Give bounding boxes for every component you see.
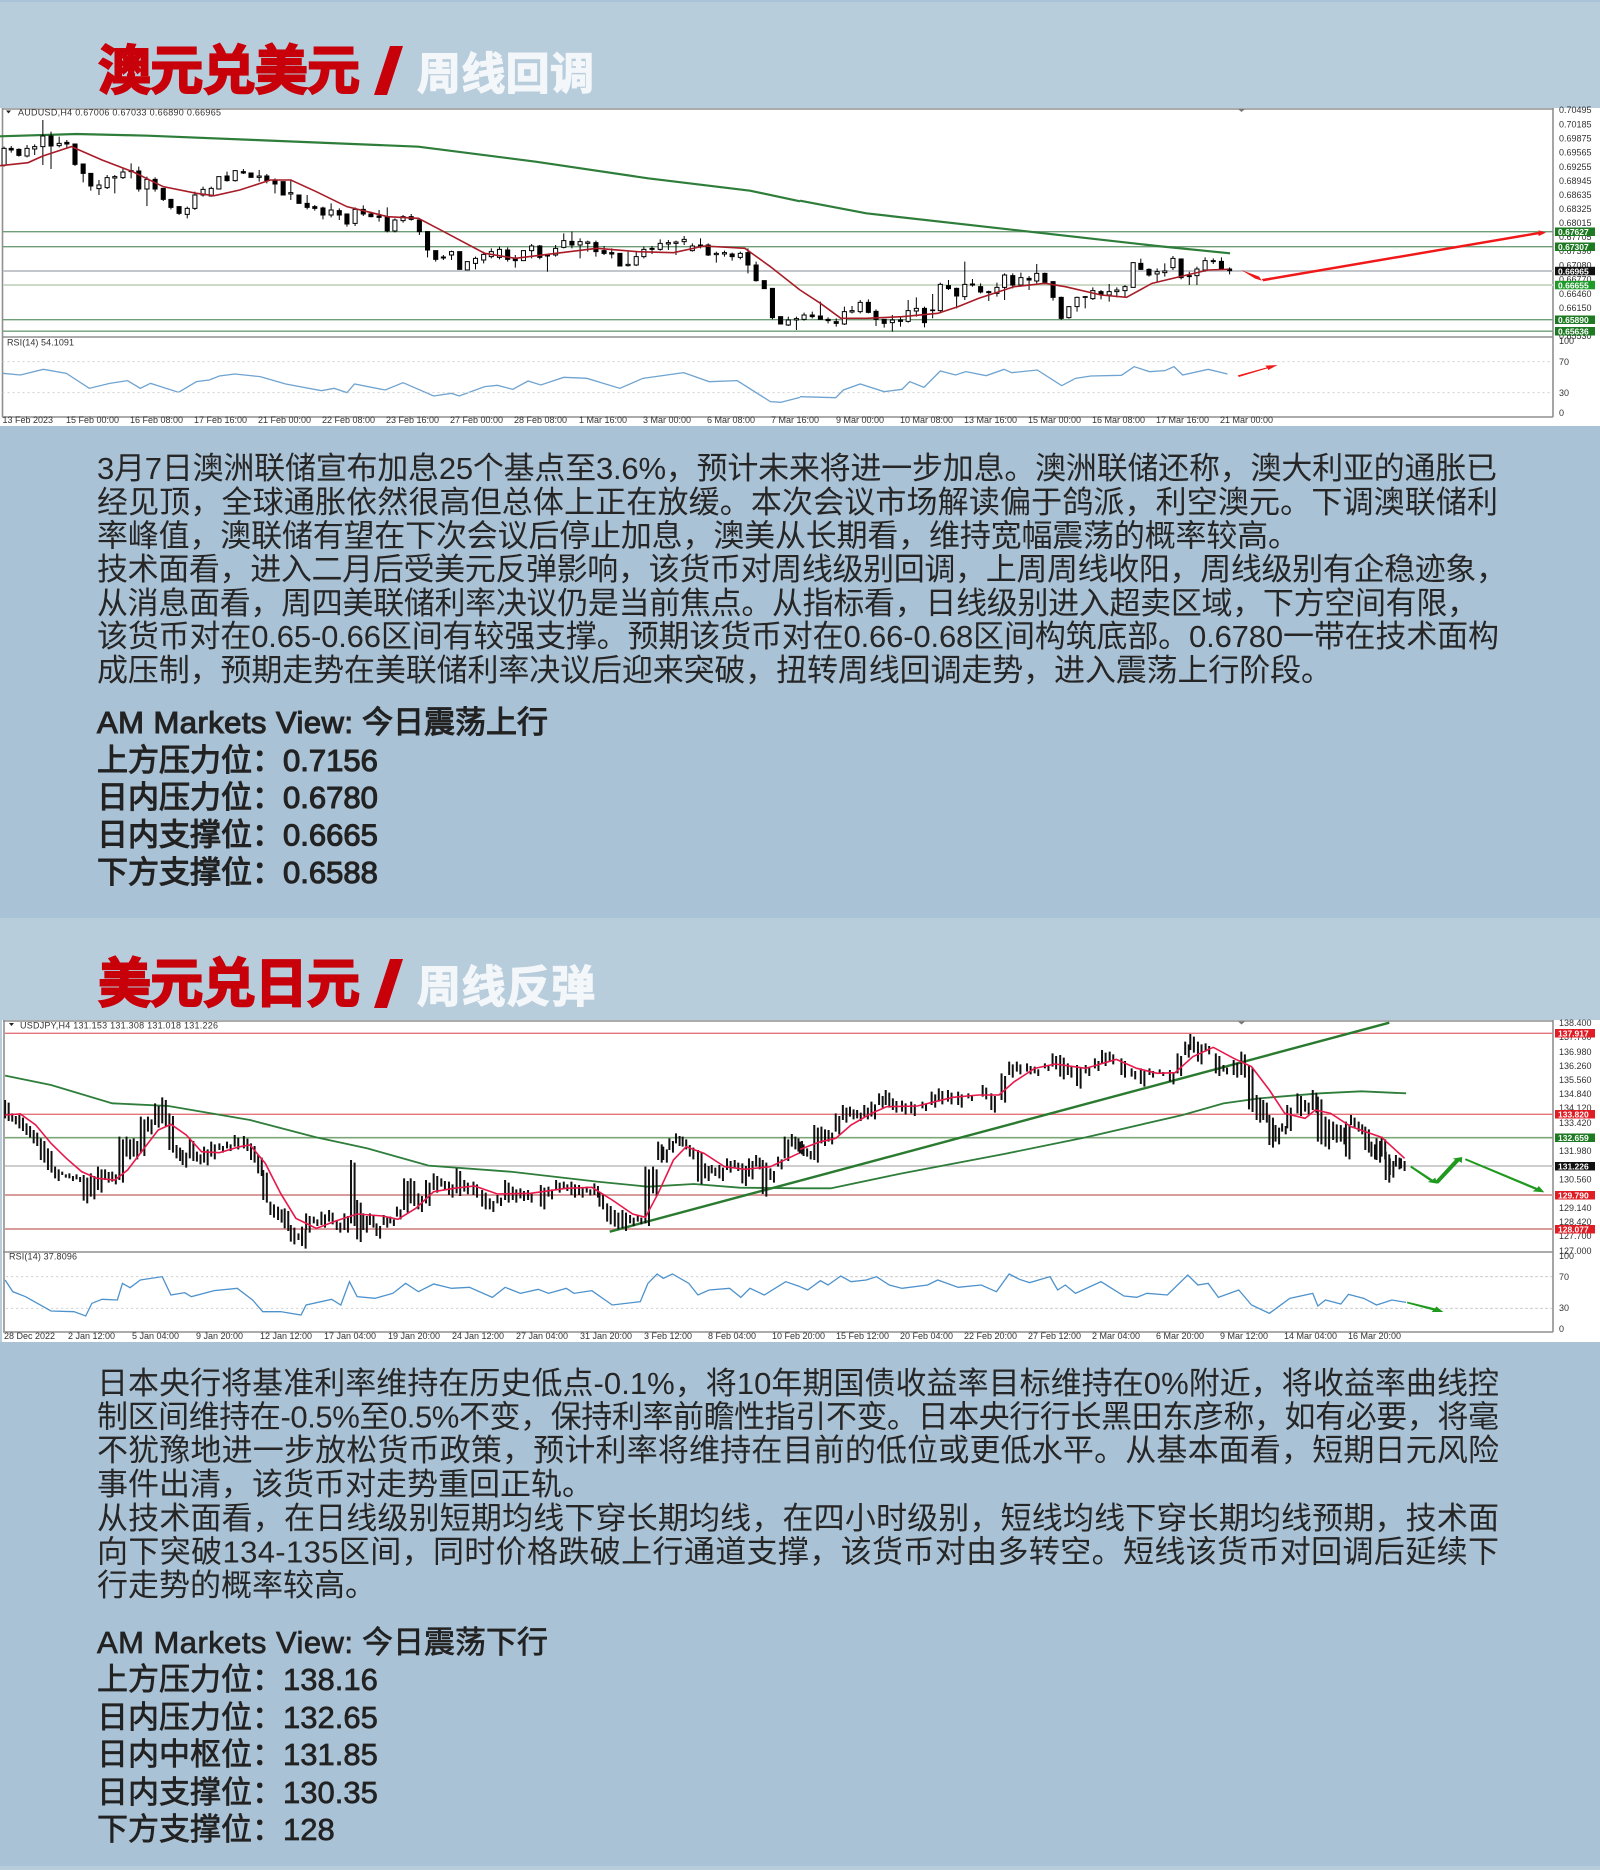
time axis labels: 1 Mar 16:00 bbox=[579, 415, 627, 425]
key levels: USD/JPY view: AM Markets View: bbox=[97, 1625, 353, 1660]
title: AUD/USD weekly pullback: 周线回调 bbox=[417, 50, 594, 99]
price level tags: 0.67627 bbox=[1558, 227, 1589, 237]
time axis labels: 19 Jan 20:00 bbox=[388, 1331, 440, 1341]
time axis labels: 22 Feb 08:00 bbox=[322, 415, 375, 425]
key levels: USD/JPY view: 上方压力位： bbox=[97, 1662, 283, 1697]
time axis labels: 2 Jan 12:00 bbox=[68, 1331, 115, 1341]
text block: AUD/USD analysis: 成压制，预期走势在美联储利率决议后迎来突破，扭转周线回调走势，进入震荡上行阶段。 bbox=[97, 653, 1332, 688]
key levels: AUD/USD view bbox=[97, 705, 548, 890]
price level tags: 133.820 bbox=[1558, 1110, 1589, 1120]
price axis labels: 129.140 bbox=[1559, 1203, 1592, 1213]
time axis labels: 20 Feb 04:00 bbox=[900, 1331, 953, 1341]
title: AUD/USD weekly pullback bbox=[98, 42, 594, 101]
price axis labels: 0.69565 bbox=[1559, 148, 1592, 158]
key levels: USD/JPY view: 今日震荡下行 bbox=[362, 1625, 548, 1660]
time axis labels: 6 Mar 08:00 bbox=[707, 415, 755, 425]
text block: AUD/USD analysis bbox=[97, 451, 1507, 688]
text block: USD/JPY analysis: 向下突破134-135区间，同时价格跌破上行通道支撑，该货币对由多转空。短线该货币对回调后延续下 bbox=[97, 1534, 1499, 1570]
key levels: AUD/USD view: 上方压力位： bbox=[97, 743, 283, 778]
price axis labels: 0.67705 bbox=[1559, 232, 1592, 242]
price axis labels: 135.560 bbox=[1559, 1075, 1592, 1085]
text block: AUD/USD analysis: 技术面看，进入二月后受美元反弹影响，该货币对周线级别回调，上周周线收阳，周线级别有企稳迹象， bbox=[97, 552, 1507, 587]
text block: AUD/USD analysis: 该货币对在0.65-0.66区间有较强支撑。预期该货币对在0.66-0.68区间构筑底部。0.6780一带在技术面构 bbox=[97, 619, 1499, 654]
price level tags: 0.66655 bbox=[1558, 280, 1589, 290]
chart caption: AUDUSD,H4 0.67006 0.67033 0.66890 0.66965 bbox=[18, 108, 221, 118]
text block: USD/JPY analysis: 行走势的概率较高。 bbox=[97, 1568, 376, 1603]
key levels: USD/JPY view: 131.85 bbox=[283, 1737, 378, 1772]
price axis labels: 0.66460 bbox=[1559, 289, 1592, 299]
price axis labels: 0.66770 bbox=[1559, 274, 1592, 284]
price axis labels: 0.70495 bbox=[1559, 105, 1592, 115]
price axis labels: 0.70185 bbox=[1559, 120, 1592, 130]
candles and moving averages, right half bbox=[800, 1023, 1553, 1313]
price level tags: 0.67307 bbox=[1558, 242, 1589, 252]
chart caption: USDJPY,H4 131.153 131.308 131.018 131.226 bbox=[20, 1020, 218, 1030]
time axis labels: 3 Mar 00:00 bbox=[643, 415, 691, 425]
price axis labels: 134.840 bbox=[1559, 1089, 1592, 1099]
key levels: AUD/USD view: 0.7156 bbox=[283, 743, 378, 778]
price level tags: 0.65890 bbox=[1558, 315, 1589, 325]
panel: USD/JPY section bbox=[0, 918, 1600, 1847]
time axis labels: 15 Mar 00:00 bbox=[1028, 415, 1081, 425]
price axis labels: 70 bbox=[1559, 357, 1569, 367]
text block: USD/JPY analysis bbox=[97, 1366, 1499, 1603]
key levels: AUD/USD view: 下方支撑位： bbox=[97, 855, 283, 890]
price axis labels: 130.560 bbox=[1559, 1174, 1592, 1184]
time axis labels: 15 Feb 00:00 bbox=[66, 415, 119, 425]
time axis labels bbox=[4, 1331, 1401, 1341]
time axis labels: 27 Jan 04:00 bbox=[516, 1331, 568, 1341]
key levels: AUD/USD view: 0.6588 bbox=[283, 855, 378, 890]
moving averages and candles, right half bbox=[800, 201, 1546, 398]
time axis labels: 22 Feb 20:00 bbox=[964, 1331, 1017, 1341]
text block: USD/JPY analysis: 制区间维持在-0.5%至0.5%不变，保持利率前瞻性指引不变。日本央行行长黑田东彦称，如有必要，将毫 bbox=[97, 1400, 1499, 1434]
text block: USD/JPY analysis: 不犹豫地进一步放松货币政策，预计利率将维持在目前的低位或更低水平。从基本面看，短期日元风险 bbox=[97, 1433, 1499, 1468]
price axis labels: 70 bbox=[1559, 1272, 1569, 1282]
horizontal price levels bbox=[3, 232, 1553, 331]
text block: USD/JPY analysis: 事件出清，该货币对走势重回正轨。 bbox=[97, 1467, 593, 1502]
title: USD/JPY weekly rebound: 美元兑日元 bbox=[98, 955, 360, 1014]
price axis labels: 127.000 bbox=[1559, 1246, 1592, 1256]
moving averages and candles, left half bbox=[0, 120, 1551, 402]
title: AUD/USD weekly pullback: 澳元兑美元 bbox=[98, 42, 360, 101]
price axis labels: 136.980 bbox=[1559, 1047, 1592, 1057]
time axis labels: 9 Mar 00:00 bbox=[836, 415, 884, 425]
time axis labels: 8 Feb 04:00 bbox=[708, 1331, 756, 1341]
text block: USD/JPY analysis: 从技术面看，在日线级别短期均线下穿长期均线，在四小时级别，短线均线下穿长期均线预期，技术面 bbox=[97, 1501, 1499, 1536]
text block: AUD/USD analysis: 3月7日澳洲联储宣布加息25个基点至3.6%，预计未来将进一步加息。澳洲联储还称，澳大利亚的通胀已 bbox=[97, 451, 1497, 486]
icon: chart shift marker bbox=[1238, 1022, 1245, 1024]
time axis labels: 17 Mar 16:00 bbox=[1156, 415, 1209, 425]
time axis labels: 21 Mar 00:00 bbox=[1220, 415, 1273, 425]
panel: AUD/USD section bbox=[0, 2, 1600, 890]
horizontal price levels bbox=[5, 1033, 1553, 1229]
price axis labels: 100 bbox=[1559, 1251, 1574, 1261]
price axis labels: 0 bbox=[1559, 1324, 1564, 1334]
key levels: USD/JPY view: 130.35 bbox=[283, 1775, 378, 1810]
time axis labels: 3 Feb 12:00 bbox=[644, 1331, 692, 1341]
price axis labels: 100 bbox=[1559, 336, 1574, 346]
time axis labels: 16 Feb 08:00 bbox=[130, 415, 183, 425]
arrow: RSI forecast up bbox=[1238, 365, 1278, 377]
time axis labels: 23 Feb 16:00 bbox=[386, 415, 439, 425]
time axis labels: 27 Feb 00:00 bbox=[450, 415, 503, 425]
time axis labels: 31 Jan 20:00 bbox=[580, 1331, 632, 1341]
price level tags: 0.65636 bbox=[1558, 326, 1589, 336]
price axis labels: 0.68635 bbox=[1559, 190, 1592, 200]
key levels: USD/JPY view: 日内中枢位： bbox=[97, 1737, 283, 1772]
candles and moving averages, left half bbox=[5, 1076, 1551, 1316]
time axis labels: 5 Jan 04:00 bbox=[132, 1331, 179, 1341]
header band: USD/JPY bbox=[0, 918, 1600, 1020]
price level tags bbox=[1555, 227, 1595, 336]
price axis labels: 133.420 bbox=[1559, 1118, 1592, 1128]
key levels: AUD/USD view: 日内压力位： bbox=[97, 780, 283, 815]
text block: AUD/USD analysis: 经见顶，全球通胀依然很高但总体上正在放缓。本次会议市场解读偏于鸽派，利空澳元。下调澳联储利 bbox=[97, 485, 1498, 520]
text block: USD/JPY analysis: 日本央行将基准利率维持在历史低点-0.1%，将10年期国债收益率目标维持在0%附近，将收益率曲线控 bbox=[97, 1366, 1499, 1401]
arrow: price forecast up bbox=[1241, 230, 1546, 281]
price axis labels: 0.68325 bbox=[1559, 204, 1592, 214]
time axis labels: 16 Mar 08:00 bbox=[1092, 415, 1145, 425]
price axis labels: 137.700 bbox=[1559, 1032, 1592, 1042]
time axis labels: 17 Jan 04:00 bbox=[324, 1331, 376, 1341]
key levels: USD/JPY view: 日内支撑位： bbox=[97, 1775, 283, 1810]
key levels: AUD/USD view: 0.6780 bbox=[283, 780, 378, 815]
price axis labels: 0.65530 bbox=[1559, 331, 1592, 341]
time axis labels: 12 Jan 12:00 bbox=[260, 1331, 312, 1341]
chart: USDJPY H4 candlesticks with RSI bbox=[0, 1018, 1600, 1342]
price level tags: 0.66965 bbox=[1558, 266, 1589, 276]
time axis labels: 13 Feb 2023 bbox=[2, 415, 53, 425]
price level tags: 137.917 bbox=[1558, 1028, 1589, 1038]
text block: AUD/USD analysis: 率峰值，澳联储有望在下次会议后停止加息，澳美从长期看，维持宽幅震荡的概率较高。 bbox=[97, 518, 1299, 554]
arrow: RSI forecast down bbox=[1407, 1302, 1443, 1312]
time axis labels: 27 Feb 12:00 bbox=[1028, 1331, 1081, 1341]
key levels: USD/JPY view: 128 bbox=[283, 1812, 335, 1847]
time axis labels: 2 Mar 04:00 bbox=[1092, 1331, 1140, 1341]
icon: chart shift marker bbox=[1238, 109, 1245, 112]
chart: AUDUSD H4 candlesticks with RSI bbox=[0, 105, 1600, 426]
key levels: AUD/USD view: 今日震荡上行 bbox=[362, 705, 548, 740]
price level tags: 132.659 bbox=[1558, 1133, 1589, 1143]
time axis labels: 28 Dec 2022 bbox=[4, 1331, 55, 1341]
bottom band bbox=[0, 1866, 1600, 1870]
time axis labels: 13 Mar 16:00 bbox=[964, 415, 1017, 425]
arrow: price forecast down-up-down bbox=[1410, 1157, 1544, 1192]
price axis labels: 0.67390 bbox=[1559, 246, 1592, 256]
price axis labels: 30 bbox=[1559, 388, 1569, 398]
time axis labels: 9 Mar 12:00 bbox=[1220, 1331, 1268, 1341]
price level tags bbox=[1555, 1028, 1595, 1234]
time axis labels: 15 Feb 12:00 bbox=[836, 1331, 889, 1341]
RSI caption: RSI(14) 37.8096 bbox=[9, 1252, 77, 1262]
title: USD/JPY weekly rebound: 周线反弹 bbox=[417, 963, 595, 1012]
icon: chart dropdown marker bbox=[6, 110, 11, 114]
time axis labels: 17 Feb 16:00 bbox=[194, 415, 247, 425]
RSI caption: RSI(14) 54.1091 bbox=[7, 338, 74, 348]
key levels: USD/JPY view bbox=[97, 1625, 548, 1847]
price level tags: 128.077 bbox=[1558, 1224, 1589, 1234]
key levels: USD/JPY view: 132.65 bbox=[283, 1700, 378, 1735]
time axis labels: 6 Mar 20:00 bbox=[1156, 1331, 1204, 1341]
price axis labels: 0.67080 bbox=[1559, 260, 1592, 270]
price axis labels: 138.400 bbox=[1559, 1018, 1592, 1028]
time axis labels: 21 Feb 00:00 bbox=[258, 415, 311, 425]
price axis labels: 0.68015 bbox=[1559, 218, 1592, 228]
price level tags: 129.790 bbox=[1558, 1190, 1589, 1200]
time axis labels: 24 Jan 12:00 bbox=[452, 1331, 504, 1341]
header band: AUD/USD bbox=[0, 2, 1600, 108]
price axis labels: 0.66150 bbox=[1559, 303, 1592, 313]
key levels: AUD/USD view: 0.6665 bbox=[283, 818, 378, 852]
price level tags: 131.226 bbox=[1558, 1162, 1589, 1172]
price axis labels: 30 bbox=[1559, 1303, 1569, 1313]
text block: AUD/USD analysis: 从消息面看，周四美联储利率决议仍是当前焦点。从指标看，日线级别进入超卖区域，下方空间有限， bbox=[97, 586, 1478, 621]
price axis labels: 0.69255 bbox=[1559, 162, 1592, 172]
key levels: AUD/USD view: 日内支撑位： bbox=[97, 818, 283, 852]
price axis labels bbox=[1559, 1018, 1592, 1334]
time axis labels: 10 Mar 08:00 bbox=[900, 415, 953, 425]
price axis labels: 0.68945 bbox=[1559, 176, 1592, 186]
price axis labels: 128.420 bbox=[1559, 1217, 1592, 1227]
time axis labels bbox=[2, 415, 1273, 425]
key levels: USD/JPY view: 日内压力位： bbox=[97, 1700, 283, 1735]
time axis labels: 16 Mar 20:00 bbox=[1348, 1331, 1401, 1341]
icon: chart dropdown marker bbox=[9, 1023, 14, 1026]
key levels: USD/JPY view: 下方支撑位： bbox=[97, 1812, 283, 1847]
time axis labels: 14 Mar 04:00 bbox=[1284, 1331, 1337, 1341]
price axis labels: 134.120 bbox=[1559, 1103, 1592, 1113]
key levels: AUD/USD view: AM Markets View: bbox=[97, 705, 353, 740]
title: USD/JPY weekly rebound bbox=[98, 955, 595, 1014]
price axis labels: 127.700 bbox=[1559, 1231, 1592, 1241]
price axis labels: 0 bbox=[1559, 408, 1564, 418]
key levels: USD/JPY view: 138.16 bbox=[283, 1662, 378, 1697]
time axis labels: 10 Feb 20:00 bbox=[772, 1331, 825, 1341]
time axis labels: 9 Jan 20:00 bbox=[196, 1331, 243, 1341]
time axis labels: 28 Feb 08:00 bbox=[514, 415, 567, 425]
price axis labels bbox=[1559, 105, 1592, 418]
time axis labels: 7 Mar 16:00 bbox=[771, 415, 819, 425]
price axis labels: 0.69875 bbox=[1559, 134, 1592, 144]
price axis labels: 131.980 bbox=[1559, 1146, 1592, 1156]
price axis labels: 136.260 bbox=[1559, 1061, 1592, 1071]
